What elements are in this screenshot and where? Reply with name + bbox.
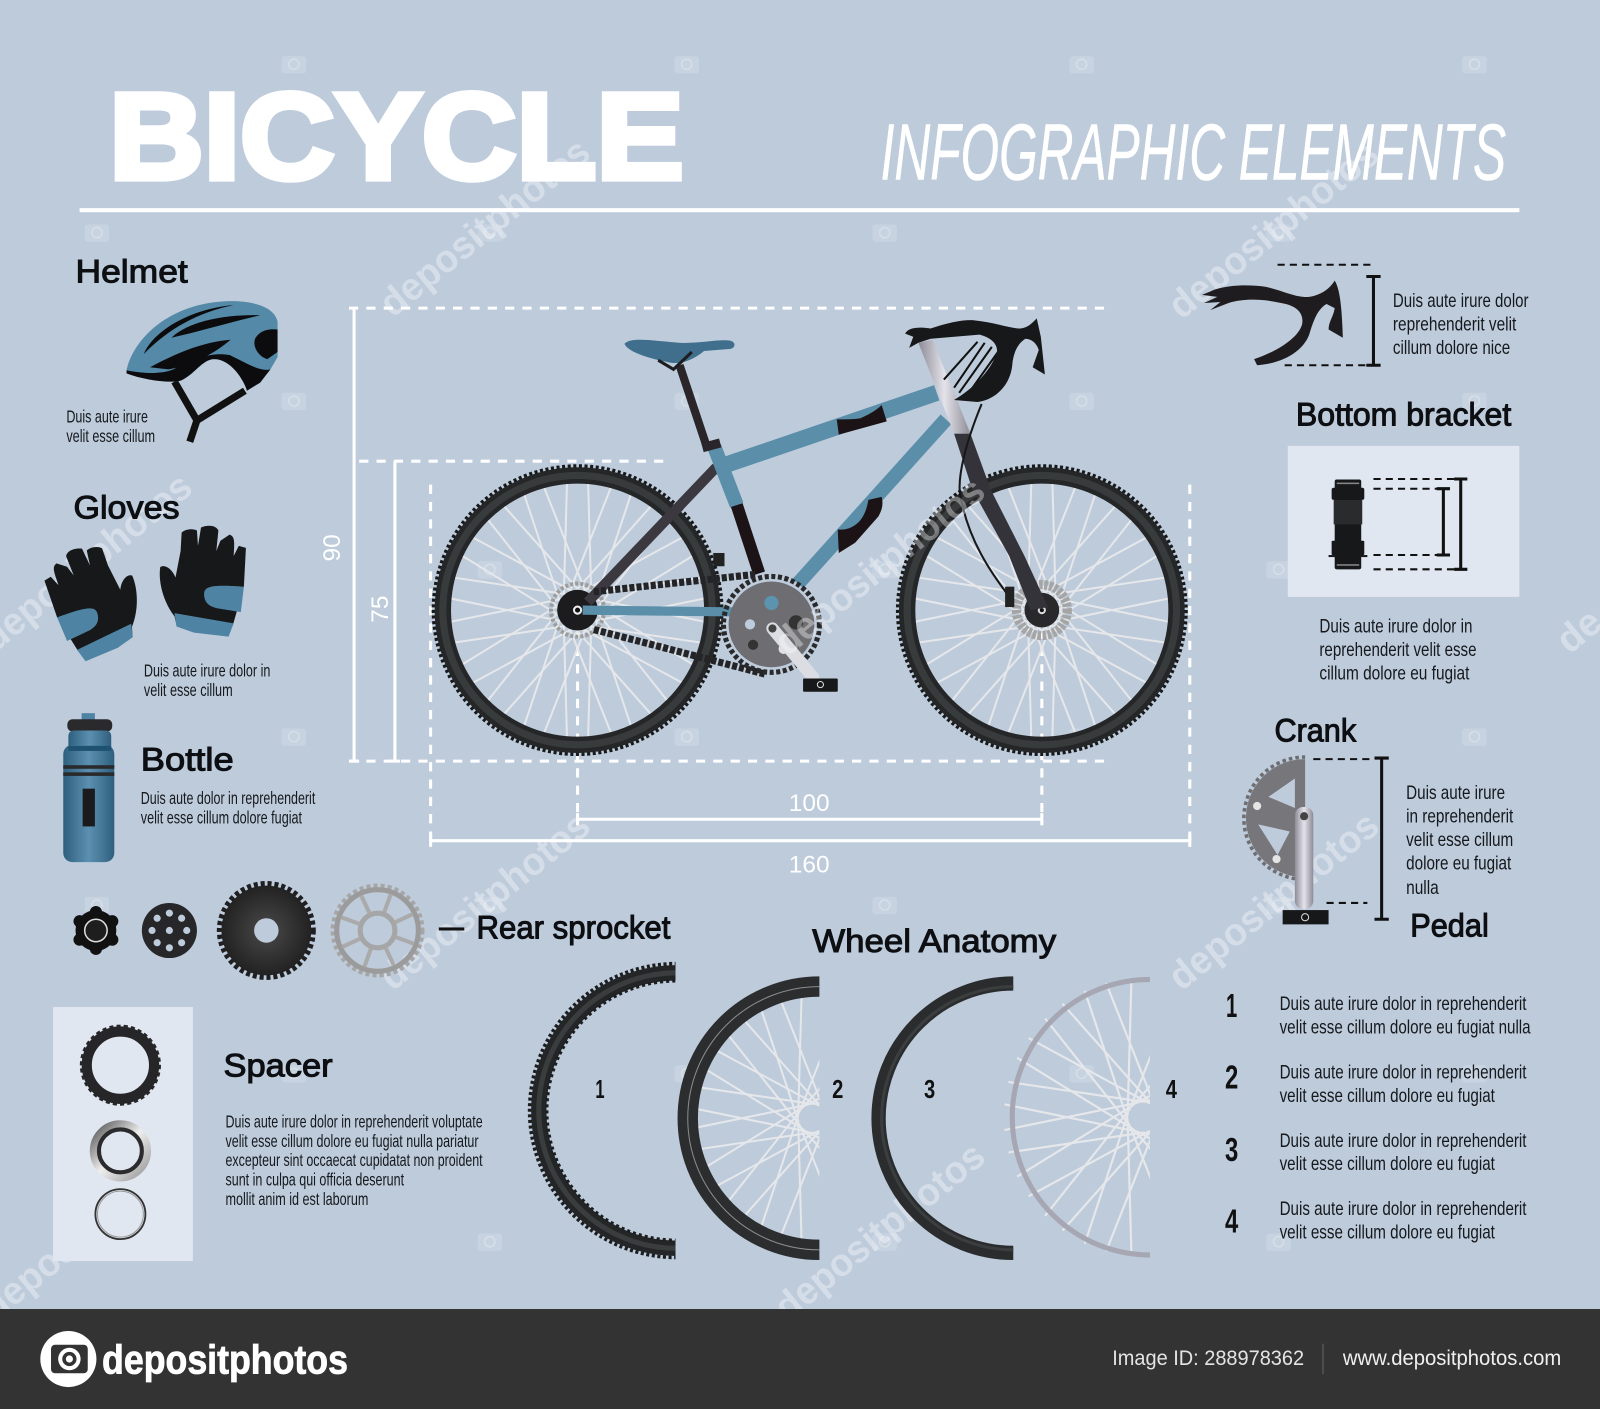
icon: handlebar [1202,281,1343,365]
rear wheel [434,466,721,754]
frame: chain stay [583,610,760,612]
legend 2 [1225,1060,1527,1107]
wheel part 4: rim with spokes [1004,976,1150,1258]
text: handlebar: Duis aute irure dolor [1393,290,1529,312]
text: spacer: velit esse cillum dolore eu fugiat nulla pariatur [226,1131,479,1151]
crank bar [1374,758,1389,919]
icon: cassette sprocket [333,886,422,975]
panel: bottom bracket [1288,395,1519,685]
text: crank: in reprehenderit [1406,805,1514,827]
icon: crank arm [1295,807,1313,909]
logo text: depositphotos [102,1336,348,1382]
text: helmet: Duis aute irure [66,406,148,426]
text: handlebar: reprehenderit velit [1393,314,1517,336]
wheel label 1: 1 [595,1076,605,1104]
front wheel [898,466,1186,754]
bracket card [1288,446,1519,597]
heading: bottle: Bottle [141,740,234,777]
text: spacer: excepteur sint occaecat cupidatat non proident [226,1150,483,1170]
dimension 90: 90 [319,534,346,561]
watermark text: depositphotos [766,469,993,664]
legend 4: Duis aute irure dolor in reprehenderit [1280,1198,1527,1220]
heading: gloves: Gloves [73,488,180,525]
wheel label 4: 4 [1166,1076,1178,1104]
watermark text: depositphotos [1160,803,1387,999]
heading: bottom bracket: Bottom bracket [1296,395,1511,432]
dimension guides [319,308,1190,878]
heading: spacer: Spacer [223,1046,333,1083]
frame: fork [954,434,1048,610]
legend: wheel parts [1225,988,1531,1244]
text: handlebar: cillum dolore nice [1393,337,1510,359]
text: bottle: velit esse cillum dolore fugiat [141,807,302,827]
icon: left glove [38,536,152,666]
watermark text: depositphotos [371,130,598,325]
wheel label 3: 3 [924,1076,935,1104]
text: crank: nulla [1406,877,1439,899]
text: spacer: mollit anim id est laborum [226,1189,368,1209]
icon: thin spacer [95,1189,145,1239]
icon: drilled disc [142,903,197,958]
wheel part 3: inner tube [871,976,1014,1260]
text: gloves [144,660,270,700]
panel: handlebar [1202,265,1529,365]
frame: seat post and saddle [624,340,734,452]
frame: head tube [918,340,970,434]
text: helmet: velit esse cillum [66,426,155,446]
legend 4: 4 [1225,1203,1238,1240]
frame: down tube [798,419,946,584]
footer bar [0,1309,1600,1409]
panel: crank and pedal [1244,712,1514,944]
drivetrain: chainring [723,576,819,672]
spacer card [53,1007,193,1261]
legend 4: velit esse cillum dolore eu fugiat [1280,1222,1495,1244]
text: bottle [141,788,315,827]
frame: seat tube [714,447,759,573]
panel: spacer [53,1007,483,1261]
legend 2: velit esse cillum dolore eu fugiat [1280,1085,1495,1107]
legend 3 [1225,1130,1527,1175]
panel: bottle [63,713,315,862]
panel: gloves [38,488,270,700]
legend 3: Duis aute irure dolor in reprehenderit [1280,1130,1527,1152]
legend 1: 1 [1226,988,1237,1025]
text: bottom bracket: Duis aute irure dolor in [1319,616,1472,638]
legend 2: Duis aute irure dolor in reprehenderit [1280,1061,1527,1083]
text: bottom bracket [1319,616,1477,685]
bracket bars [1437,479,1467,569]
icon: bearing spacer [94,1124,147,1177]
bracket dimensions [1373,479,1457,569]
heading: pedal: Pedal [1410,907,1489,944]
text: bottle: Duis aute dolor in reprehenderit [141,788,315,808]
watermark text: depositphotos [1160,132,1387,327]
text: crank: Duis aute irure [1406,782,1505,804]
watermark: camera marks [85,56,1487,1251]
icon: pedal [1283,910,1329,924]
site url: www.depositphotos.com [1342,1346,1561,1370]
legend 1: Duis aute irure dolor in reprehenderit [1280,993,1527,1015]
heading: rear sprocket: Rear sprocket [477,909,670,946]
text: helmet [66,406,155,446]
panel: rear sprocket [73,884,670,977]
icon: toothed spacer [82,1026,159,1104]
icon: bottle [63,713,114,862]
icon: right glove [160,526,246,637]
leader [439,927,464,930]
text: bottom bracket: reprehenderit velit esse [1319,639,1477,661]
panel: wheel anatomy [528,928,1177,1260]
icon: half chainring [1242,755,1306,880]
text: gloves: velit esse cillum [144,680,233,700]
drivetrain: crank arm and pedal [768,624,838,692]
text: gloves: Duis aute irure dolor in [144,660,270,680]
dimension 100: 100 [789,790,830,817]
panel: helmet [66,253,278,446]
legend 3: 3 [1225,1132,1238,1169]
crank dimension [1313,759,1372,903]
watermark text: depositphotos [766,1134,993,1329]
header rule [80,208,1519,212]
text: spacer [226,1111,483,1209]
image id: Image ID: 288978362 [1112,1346,1304,1370]
icon: lock nut [73,906,118,955]
watermark text: depositphotos [371,803,598,999]
wheel label 2: 2 [832,1076,843,1104]
heading: wheel anatomy: Wheel Anatomy [812,922,1057,959]
frame: top tube [724,393,937,465]
text: spacer: Duis aute irure dolor in reprehenderit voluptate [226,1111,483,1131]
handlebar bracket [1366,276,1381,365]
icon: bracket [1329,480,1367,569]
text: crank: velit esse cillum [1406,829,1513,851]
text: crank: dolore eu fugiat [1406,852,1512,874]
text: bottom bracket: cillum dolore eu fugiat [1319,663,1470,685]
text: spacer: sunt in culpa qui officia deserunt [226,1170,404,1190]
heading: helmet: Helmet [76,253,188,290]
title: BICYCLE [109,68,684,205]
bicycle [434,318,1186,754]
logo icon [40,1331,96,1387]
legend 4 [1225,1198,1527,1244]
handlebar [905,318,1045,607]
wheel part 1: tyre [528,962,676,1260]
heading: crank: Crank [1274,712,1357,749]
wheel part 2: wheel with spokes [678,976,820,1260]
legend 1 [1226,988,1531,1039]
drivetrain: chain [594,574,766,674]
legend 2: 2 [1225,1060,1238,1097]
legend 1: velit esse cillum dolore eu fugiat nulla [1280,1017,1531,1039]
text: crank [1406,782,1514,899]
text: handlebar [1393,290,1529,359]
icon: helmet [127,301,278,442]
icon: large sprocket [219,884,313,977]
legend 3: velit esse cillum dolore eu fugiat [1280,1153,1495,1175]
dimension 75: 75 [367,595,394,623]
handlebar dimension [1278,265,1372,365]
dimension 160: 160 [789,851,830,878]
frame: seat stay [588,467,716,602]
